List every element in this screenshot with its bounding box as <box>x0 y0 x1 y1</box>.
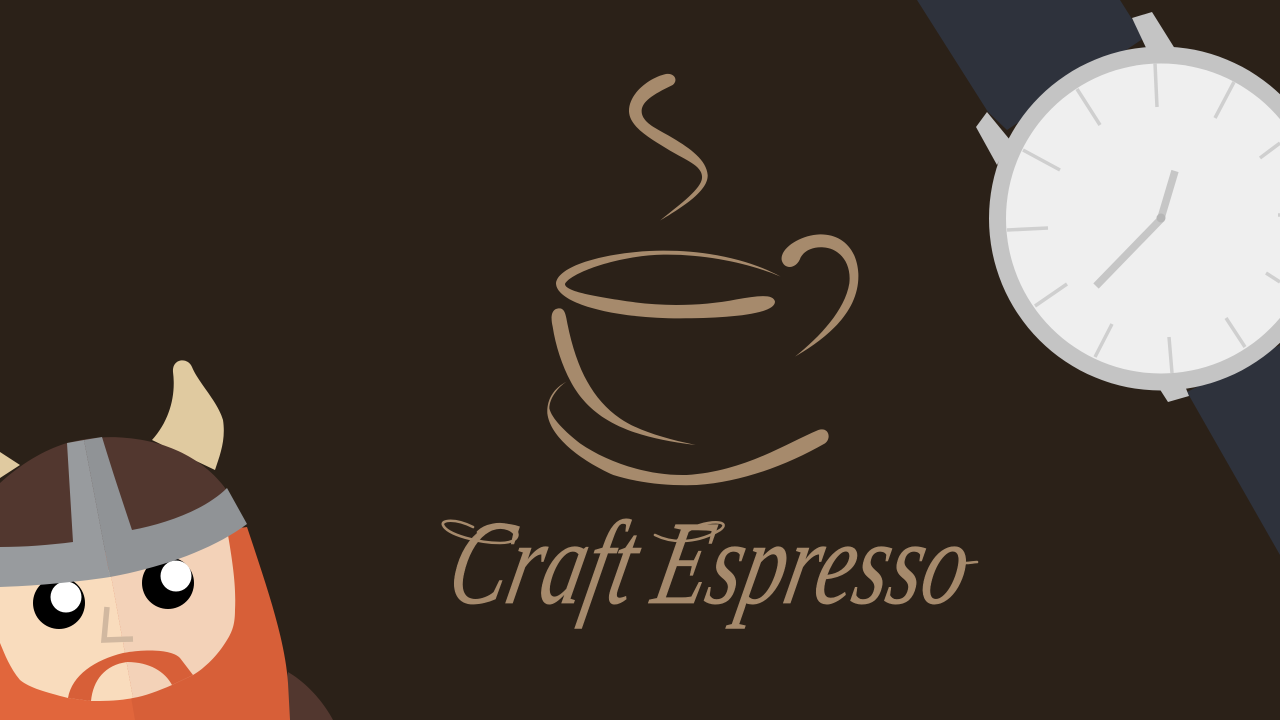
band left half <box>0 440 110 587</box>
viking right eye <box>142 557 194 609</box>
icon: coffee cup logo <box>547 74 858 485</box>
watch strap <box>917 0 1280 555</box>
icon: viking character <box>0 360 333 720</box>
viking beard left half <box>0 560 135 720</box>
hour ticks <box>1007 63 1280 373</box>
steam <box>629 74 708 221</box>
cup rim <box>556 251 781 318</box>
title flourishes <box>443 521 977 563</box>
face right half <box>110 535 235 698</box>
viking face <box>0 535 235 701</box>
viking nose <box>104 607 133 640</box>
watch centre pin <box>1156 214 1166 222</box>
viking horns <box>0 360 224 478</box>
viking moustache <box>68 651 193 701</box>
cup body <box>552 308 696 445</box>
icon: wristwatch <box>917 0 1280 555</box>
saucer <box>547 382 829 485</box>
viking beard <box>0 527 290 720</box>
band right half <box>84 437 247 577</box>
watch hands <box>1096 171 1175 286</box>
watch face <box>1006 64 1280 374</box>
watch bezel <box>989 46 1280 390</box>
viking left eye <box>33 577 85 629</box>
watch lugs <box>976 12 1189 402</box>
viking shoulder <box>280 672 333 720</box>
title text: Craft Espresso <box>438 497 983 630</box>
viking helmet dome <box>0 437 235 560</box>
cup handle <box>782 234 858 357</box>
face left half <box>0 570 133 701</box>
viking helmet band <box>0 437 247 587</box>
title: Craft Espresso <box>438 497 983 630</box>
